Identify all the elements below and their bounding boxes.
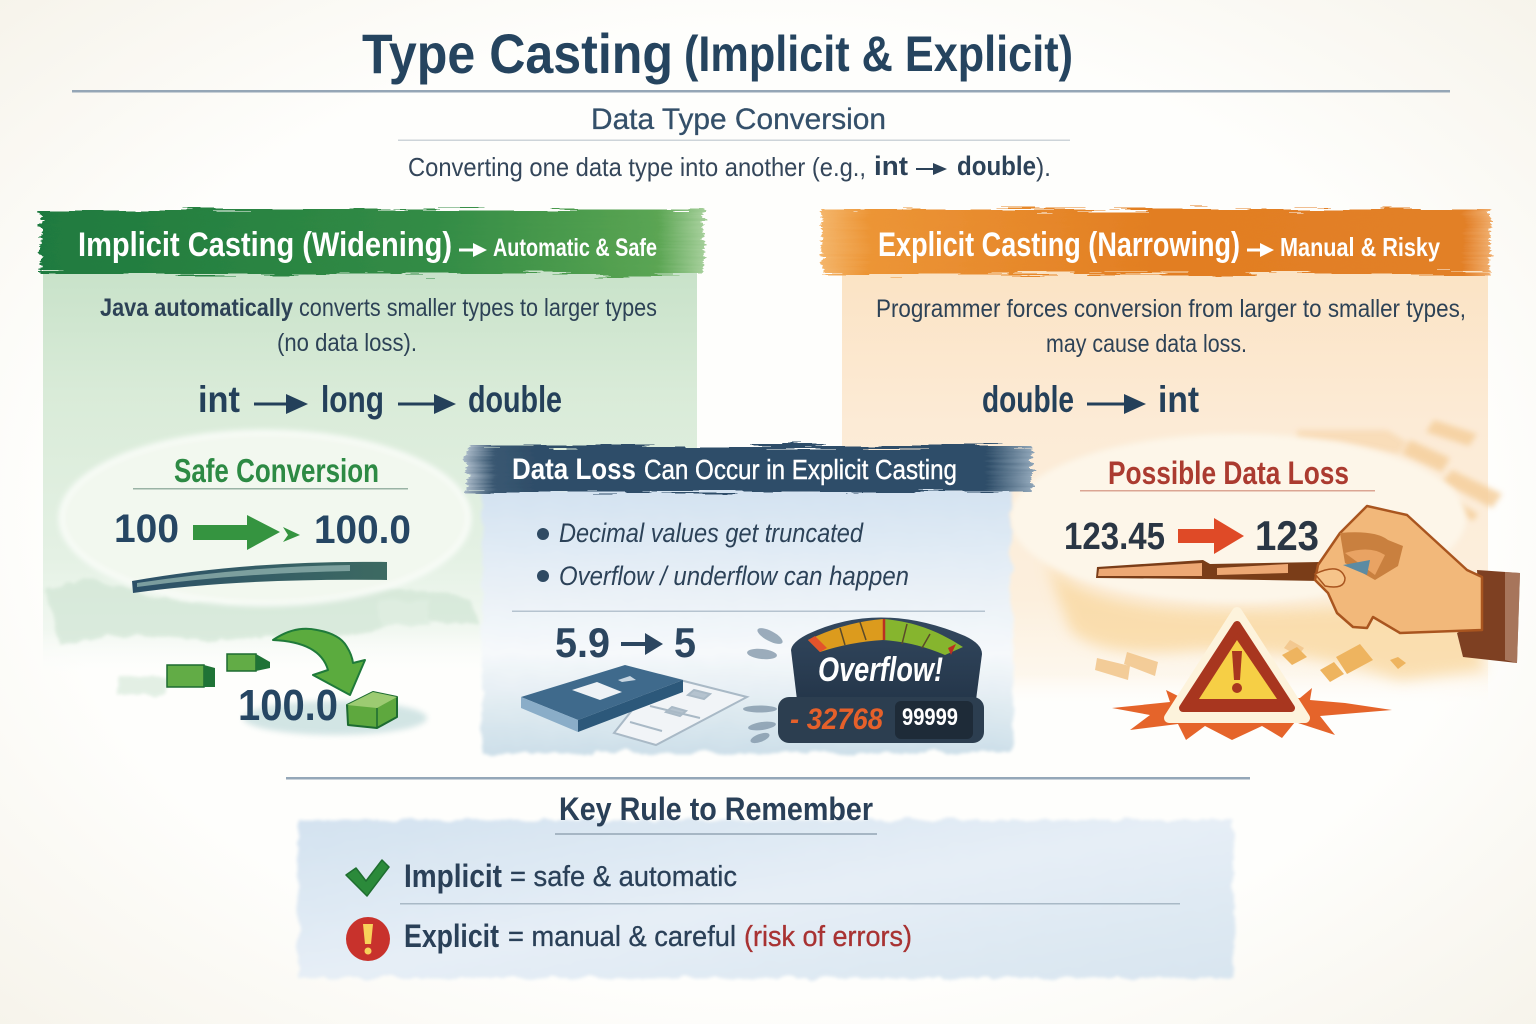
panel background (298, 820, 1234, 978)
possible data loss oval (1010, 434, 1466, 602)
panel: explicit casting (822, 209, 1520, 740)
icon: alert circle (346, 917, 390, 961)
explanation text (100, 294, 657, 357)
heading: Key Rule to Remember (559, 791, 873, 827)
label: possible data loss: Possible Data Loss (1108, 455, 1349, 491)
heading bar: Implicit Casting (Widening) (78, 226, 452, 264)
description: double (957, 151, 1036, 181)
heading bar (822, 209, 1490, 274)
explanation text: may cause data loss. (1046, 330, 1247, 358)
widening chain: long (321, 379, 384, 420)
panel background (43, 270, 697, 680)
subtitle: Data Type Conversion (591, 103, 886, 136)
panel: key rule (286, 777, 1250, 978)
moving cubes (167, 629, 427, 735)
paint fragments (1095, 640, 1304, 680)
narrowing chain (982, 379, 1199, 420)
title: (Implicit & Explicit) (684, 26, 1073, 82)
truncation example: 5 (674, 619, 696, 666)
overflow gauge: - 32768 (790, 703, 883, 736)
bar (132, 562, 387, 593)
finger shading (1340, 532, 1403, 580)
widening chain: double (468, 379, 562, 420)
hand (1315, 506, 1520, 663)
painted bricks (1297, 420, 1502, 521)
motion streaks (743, 625, 785, 745)
explanation text: converts smaller types to larger types (299, 294, 657, 322)
safe conversion oval (61, 432, 469, 604)
counter (778, 697, 984, 743)
bullet list: Overflow / underflow can happen (559, 561, 909, 591)
implicit rule: Implicit (404, 858, 502, 894)
description: int (874, 151, 908, 181)
heading bar (466, 446, 1032, 492)
heading bar: Explicit Casting (Narrowing) (878, 226, 1240, 264)
widening chain: int (198, 379, 240, 420)
bullet list (537, 518, 909, 591)
overflow gauge: 99999 (902, 704, 958, 731)
curved arrow (273, 629, 365, 695)
arrow: red (1178, 518, 1244, 554)
moving cubes: 100.0 (238, 681, 338, 730)
safe conversion oval: 100 (114, 507, 179, 551)
heading bar: Can Occur in Explicit Casting (644, 454, 957, 485)
overflow gauge: Overflow! (818, 651, 943, 689)
title (362, 22, 1073, 85)
implicit rule (404, 858, 737, 894)
truncation example: 5.9 (555, 619, 610, 666)
label: safe conversion: Safe Conversion (174, 452, 379, 489)
description: Converting one data type into another (e.g., (408, 152, 866, 182)
explicit rule: (risk of errors) (744, 921, 912, 953)
heading bar: Automatic & Safe (493, 234, 657, 262)
possible data loss oval: 123 (1255, 512, 1319, 559)
explanation text (876, 295, 1466, 358)
narrowing chain: double (982, 379, 1074, 420)
heading bar: Manual & Risky (1280, 232, 1440, 262)
possible data loss oval: 123.45 (1064, 516, 1165, 558)
cuff (1457, 570, 1520, 663)
explicit rule: = manual & careful (508, 921, 736, 953)
explicit rule: Explicit (404, 918, 499, 954)
heading bar: Data Loss (512, 453, 636, 486)
snapped stick (1096, 560, 1320, 581)
explicit rule (404, 918, 912, 954)
safe conversion oval: 100.0 (314, 508, 411, 552)
panel: data loss (466, 446, 1032, 753)
explanation text: Programmer forces conversion from larger to smaller types, (876, 295, 1466, 323)
implicit rule: = safe & automatic (510, 861, 737, 893)
debris (1282, 644, 1406, 682)
bullet list: Decimal values get truncated (559, 518, 864, 548)
icon: check mark (346, 860, 389, 896)
description: ). (1036, 152, 1051, 182)
arrow: green (193, 515, 280, 550)
splatter (1112, 688, 1392, 740)
book and paper (521, 665, 747, 745)
overflow gauge (778, 617, 984, 743)
truncation example (555, 619, 696, 666)
painted band (1045, 560, 1485, 680)
heading bar (40, 210, 704, 274)
warning triangle (1112, 612, 1406, 740)
panel background (842, 270, 1488, 710)
explanation text: (no data loss). (277, 329, 417, 357)
panel background (482, 488, 1012, 753)
painted texture (46, 580, 480, 696)
widening chain (198, 379, 562, 420)
panel: implicit casting (40, 210, 704, 735)
explanation text: Java automatically (100, 294, 293, 322)
narrowing chain: int (1158, 379, 1199, 420)
green cube (347, 692, 397, 728)
title: Type Casting (362, 22, 673, 85)
